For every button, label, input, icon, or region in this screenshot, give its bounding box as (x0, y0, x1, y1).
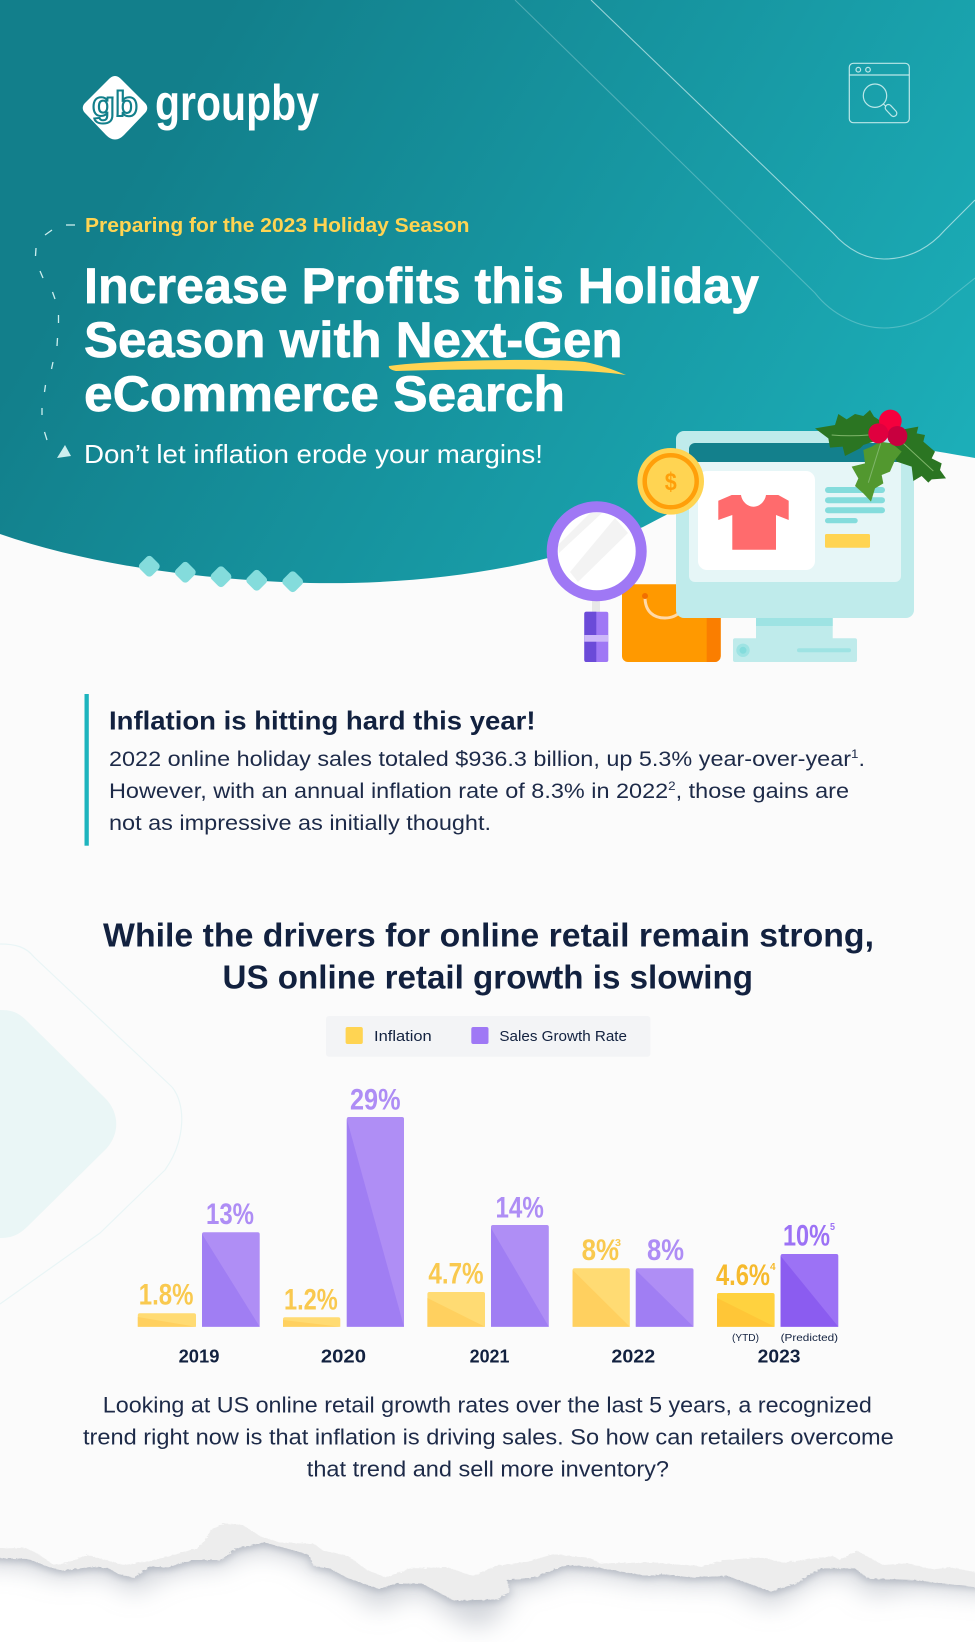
closing paragraph: that trend and sell more inventory? (307, 1456, 669, 1482)
decorative diamonds (137, 554, 305, 594)
decorative background diamond (0, 944, 182, 1304)
yellow brush underline (389, 360, 626, 375)
decorative header lines (515, 0, 975, 328)
bars 2022: 8% (647, 1234, 684, 1267)
header background (0, 0, 975, 583)
bars 2023: 4 (770, 1262, 776, 1273)
icon: browser search (849, 63, 909, 123)
logo (83, 75, 319, 140)
bars 2023: (Predicted) (781, 1332, 838, 1344)
legend (326, 1016, 650, 1057)
year labels: 2021 (470, 1347, 510, 1367)
bars 2021 (427, 1191, 549, 1327)
bars 2022: 3 (615, 1238, 621, 1249)
year labels: 2019 (179, 1347, 219, 1367)
logo: groupby (155, 75, 319, 131)
callout body text: . (858, 748, 865, 771)
year labels: 2022 (611, 1347, 655, 1367)
year labels: 2023 (758, 1347, 800, 1367)
legend: Inflation (374, 1028, 432, 1045)
bars 2022: 8% (582, 1234, 619, 1267)
callout body text: However, with an annual inflation rate of 8.3% in 2022 (109, 780, 610, 803)
callout heading: Inflation is hitting hard this year! (109, 705, 536, 735)
icon: gold coin (637, 448, 704, 515)
icon: holly (815, 410, 946, 502)
callout body text: 1 (851, 747, 859, 761)
chart heading (103, 916, 874, 996)
bars 2023: 10% (783, 1219, 830, 1252)
callout body text: 2022 online holiday sales totaled $936.3 billion, up 5.3% year-over-year (109, 748, 774, 771)
callout accent bar (84, 694, 89, 846)
closing paragraph (83, 1393, 894, 1482)
year labels (179, 1347, 801, 1367)
year labels: 2020 (321, 1347, 366, 1367)
title (84, 258, 759, 422)
chart heading: While the drivers for online retail remain strong, (103, 916, 874, 954)
icon: logo diamond (83, 76, 147, 140)
closing paragraph: trend right now is that inflation is driving sales. So how can retailers overcome (83, 1424, 894, 1449)
callout body text: 2 (668, 779, 676, 793)
illustration: ecommerce scene (552, 410, 946, 662)
bars 2023: 4.6% (716, 1259, 770, 1292)
icon: t-shirt (718, 495, 789, 550)
title: eCommerce Search (84, 366, 565, 422)
bars 2023: (YTD) (732, 1332, 759, 1344)
title: Increase Profits this Holiday (84, 258, 759, 314)
chart heading: US online retail growth is slowing (222, 958, 753, 996)
legend: Sales Growth Rate (499, 1028, 627, 1045)
torn paper edge (0, 1473, 975, 1642)
callout body text: , those gains are (676, 780, 849, 803)
callout body text (109, 747, 865, 835)
icon: monitor (676, 431, 914, 662)
bars 2019: 13% (206, 1198, 254, 1231)
icon: shopping bag (622, 584, 721, 662)
bars 2020: 29% (350, 1083, 400, 1116)
bars 2019 (138, 1198, 260, 1327)
bars 2019: 1.8% (139, 1278, 194, 1311)
bars 2023 (716, 1219, 838, 1344)
dashed arrow path (36, 225, 75, 458)
bars 2021: 14% (496, 1191, 544, 1224)
subtitle: Don’t let inflation erode your margins! (84, 439, 543, 469)
title: Season with Next-Gen (84, 312, 622, 368)
icon: magnifying glass (552, 507, 641, 662)
bars 2020 (283, 1083, 404, 1327)
icon: gold coin: $ (665, 468, 677, 496)
bars 2020: 1.2% (284, 1283, 338, 1316)
callout body text: not as impressive as initially thought. (109, 812, 491, 835)
bars 2022 (573, 1234, 694, 1327)
panel: inflation callout (84, 694, 865, 846)
bars 2021: 4.7% (428, 1257, 484, 1290)
bars 2023: 5 (830, 1222, 835, 1233)
closing paragraph: Looking at US online retail growth rates over the last 5 years, a recognized (103, 1393, 872, 1418)
logo: gb (92, 85, 138, 124)
eyebrow text: Preparing for the 2023 Holiday Season (85, 215, 470, 237)
bar chart (138, 1083, 838, 1367)
